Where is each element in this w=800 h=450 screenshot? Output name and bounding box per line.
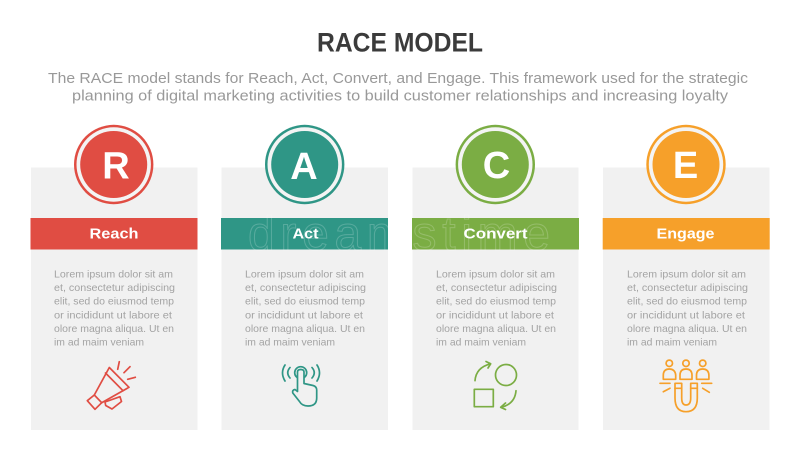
body text: Act xyxy=(245,268,366,348)
body text: Reach: or incididunt ut labore et xyxy=(54,309,172,321)
badge: E: E xyxy=(673,145,698,187)
body text: Engage: im ad maim veniam xyxy=(627,336,717,348)
panel: Reach xyxy=(30,125,198,430)
header bar: Engage xyxy=(603,218,770,250)
body text: Reach: elit, sed do eiusmod temp xyxy=(54,296,174,308)
body text: Engage: Lorem ipsum dolor sit am xyxy=(627,268,746,280)
body text: Convert: et, consectetur adipiscing xyxy=(436,282,557,294)
subtitle text block: planning of digital marketing activities to build customer relationships and increasing loyalty xyxy=(72,88,729,104)
icon: tapping hand xyxy=(282,365,320,406)
body text: Reach: Lorem ipsum dolor sit am xyxy=(54,268,173,280)
body text: Engage: or incididunt ut labore et xyxy=(627,309,745,321)
header bar: Convert: Convert xyxy=(464,226,528,242)
body text: Convert: im ad maim veniam xyxy=(436,336,526,348)
body text: Act: elit, sed do eiusmod temp xyxy=(245,296,365,308)
body text: Reach: im ad maim veniam xyxy=(54,336,144,348)
body text: Act: Lorem ipsum dolor sit am xyxy=(245,268,364,280)
subtitle text block xyxy=(48,70,749,104)
body text: Engage: olore magna aliqua. Ut en xyxy=(627,323,747,335)
header bar: Act: Act xyxy=(292,226,319,242)
badge: R: R xyxy=(102,146,130,188)
body text: Reach xyxy=(54,268,175,348)
body text: Convert: olore magna aliqua. Ut en xyxy=(436,323,556,335)
icon: magnet attracting people xyxy=(660,360,712,412)
panel: Act xyxy=(221,125,388,430)
body text: Act: im ad maim veniam xyxy=(245,336,335,348)
body text: Engage: et, consectetur adipiscing xyxy=(627,282,748,294)
header bar: Engage: Engage xyxy=(656,226,714,242)
body text: Reach: et, consectetur adipiscing xyxy=(54,282,175,294)
body text: Engage xyxy=(627,268,748,348)
badge: C: C xyxy=(483,145,510,187)
badge: E xyxy=(646,125,726,204)
body text: Act: or incididunt ut labore et xyxy=(245,309,363,321)
body text: Convert: or incididunt ut labore et xyxy=(436,309,554,321)
body text: Reach: olore magna aliqua. Ut en xyxy=(54,323,174,335)
header bar: Convert xyxy=(412,218,579,250)
header bar: Reach: Reach xyxy=(90,226,138,242)
icon: megaphone xyxy=(87,362,135,409)
body text: Engage: elit, sed do eiusmod temp xyxy=(627,296,747,308)
watermark: dreamstime xyxy=(248,208,550,261)
body text: Convert xyxy=(436,268,557,348)
title: RACE MODEL xyxy=(317,28,483,58)
subtitle text block: The RACE model stands for Reach, Act, Convert, and Engage. This framework used for the strategic xyxy=(48,70,749,87)
header bar: Act xyxy=(221,218,388,250)
body text: Act: olore magna aliqua. Ut en xyxy=(245,323,365,335)
badge: A xyxy=(265,125,344,204)
body text: Act: et, consectetur adipiscing xyxy=(245,282,366,294)
panel: Convert xyxy=(412,125,579,430)
header bar: Reach xyxy=(30,218,198,250)
badge: A: A xyxy=(290,146,318,188)
body text: Convert: Lorem ipsum dolor sit am xyxy=(436,268,555,280)
panel: Engage xyxy=(603,125,770,430)
badge: R xyxy=(74,125,153,204)
badge: C xyxy=(456,125,535,204)
icon: shapes with cycle arrows xyxy=(474,362,516,410)
body text: Convert: elit, sed do eiusmod temp xyxy=(436,296,556,308)
